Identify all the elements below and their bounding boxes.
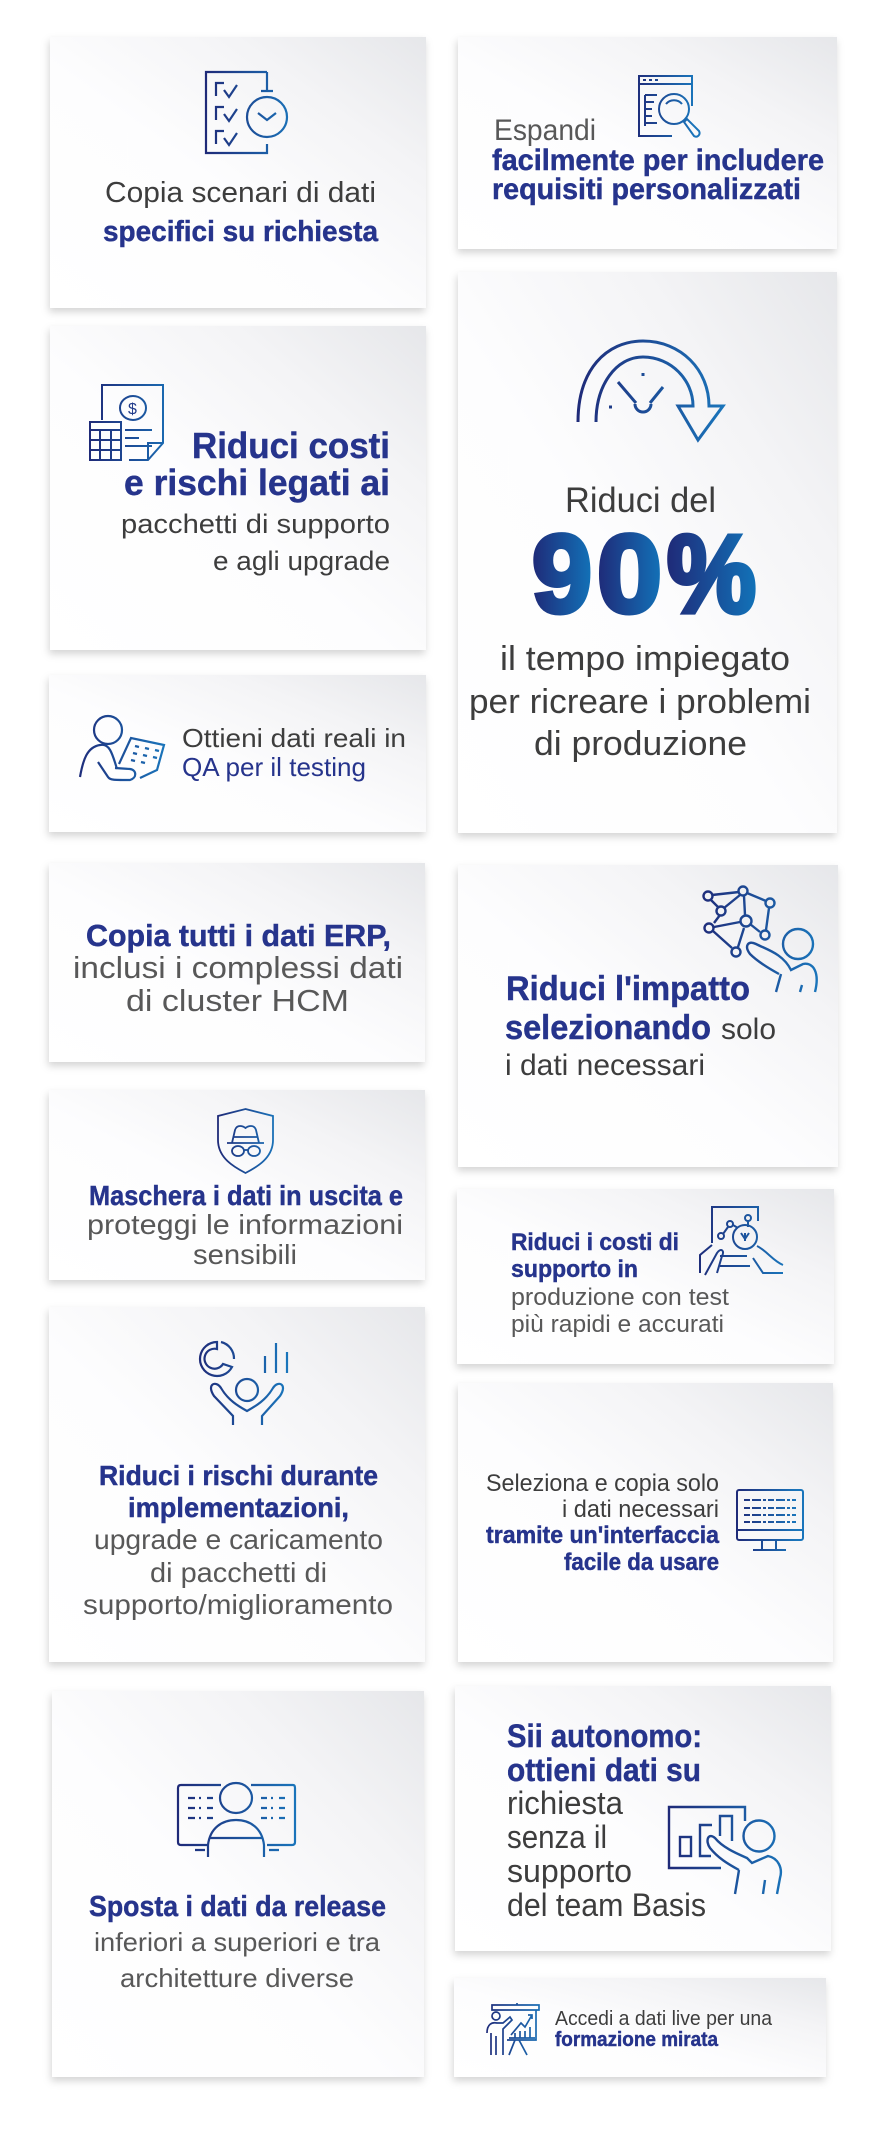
- text: riduci i rischi: di pacchetti di: [150, 1557, 327, 1588]
- text: copia scenari: specifici su richiesta: [103, 216, 379, 248]
- icon: presenter at board: [487, 2003, 539, 2055]
- text: riduci l'impatto: Riduci l'impatto: [506, 970, 750, 1008]
- text: riduci i costi: Riduci i costi di: [511, 1229, 679, 1256]
- text: riduci costi: e rischi legati ai: [124, 462, 390, 503]
- text: maschera: [87, 1180, 403, 1270]
- panel: seleziona e copia: [458, 1383, 833, 1662]
- panel: sposta i dati: [52, 1691, 424, 2077]
- panel: copia scenari di dati: [50, 37, 426, 308]
- text: riduci i rischi: Riduci i rischi durante: [99, 1460, 378, 1491]
- stat: 90%: %: [667, 513, 756, 636]
- text: riduci i rischi: supporto/miglioramento: [83, 1589, 393, 1620]
- icon: person at monitor: [178, 1783, 295, 1857]
- text: copia scenari: [103, 177, 379, 248]
- text: accedi a dati live: [555, 2008, 773, 2051]
- text: riduci i rischi: upgrade e caricamento: [94, 1524, 383, 1555]
- text: il tempo impiegato: [469, 640, 811, 763]
- card background: [49, 1090, 425, 1280]
- panel: maschera i dati: [49, 1090, 425, 1280]
- text: riduci i costi: supporto in: [511, 1256, 638, 1283]
- text: riduci i costi: produzione con test: [511, 1284, 729, 1311]
- card background: [49, 863, 425, 1062]
- icon: hands with tablet and magnifier: [700, 1207, 783, 1275]
- text: copia tutti i dati ERP: [73, 918, 403, 1018]
- icon: clock with arrow: [578, 341, 723, 440]
- panel: dati reali in QA: [49, 675, 426, 832]
- text: sposta i dati: [89, 1891, 386, 1993]
- text: riduci i rischi: [83, 1460, 393, 1620]
- text: sii autonomo: del team Basis: [507, 1887, 706, 1923]
- card background: [50, 326, 426, 650]
- card background: [50, 37, 426, 308]
- text: sii autonomo: ottieni dati su: [507, 1752, 701, 1788]
- stat: 90%: [532, 513, 756, 636]
- text: sii autonomo: senza il: [507, 1819, 607, 1855]
- text: riduci l'impatto: selezionando: [505, 1009, 711, 1047]
- panel: riduci i rischi: [49, 1307, 425, 1662]
- card background: [458, 272, 837, 833]
- text: espandi: [492, 114, 824, 206]
- text: maschera: proteggi le informazioni: [87, 1209, 403, 1240]
- icon: person at laptop: [80, 716, 164, 780]
- text: riduci costi: e agli upgrade: [213, 546, 390, 576]
- text: riduci costi: Riduci costi: [192, 425, 390, 466]
- panel: riduci costi e rischi: [50, 326, 426, 650]
- text: sii autonomo: [507, 1718, 706, 1923]
- card background: [457, 1189, 834, 1364]
- text: seleziona e copia: facile da usare: [564, 1549, 719, 1576]
- text: seleziona e copia: Seleziona e copia solo: [486, 1470, 719, 1497]
- panel: riduci del 90%: [458, 272, 837, 833]
- text: copia tutti i dati ERP: inclusi i complessi dati: [73, 950, 403, 985]
- stat: 90%: 0: [597, 513, 662, 636]
- text: riduci l'impatto: solo: [721, 1013, 776, 1046]
- text: sii autonomo: Sii autonomo:: [507, 1718, 702, 1754]
- text: ottieni dati reali: Ottieni dati reali in: [182, 723, 406, 753]
- text: accedi a dati live: Accedi a dati live per una: [555, 2008, 773, 2030]
- icon: window with magnifier: [639, 76, 700, 137]
- text: copia tutti i dati ERP: Copia tutti i dati ERP,: [86, 918, 391, 953]
- text: sposta i dati: Sposta i dati da release: [89, 1891, 386, 1923]
- card background: [458, 37, 837, 249]
- text: riduci i rischi: implementazioni,: [128, 1492, 349, 1523]
- text: seleziona e copia: i dati necessari: [562, 1496, 719, 1523]
- text: espandi: Espandi: [494, 114, 596, 147]
- icon: invoice with table: $: [128, 401, 137, 418]
- text: il tempo impiegato: il tempo impiegato: [500, 640, 790, 678]
- text: riduci l'impatto: i dati necessari: [505, 1049, 705, 1082]
- icon: person with network: [704, 886, 817, 992]
- panel: copia tutti i dati ERP: [49, 863, 425, 1062]
- text: copia tutti i dati ERP: di cluster HCM: [126, 983, 349, 1018]
- icon: monitor: [737, 1490, 803, 1550]
- text: maschera: Maschera i dati in uscita e: [89, 1180, 403, 1211]
- text: sposta i dati: architetture diverse: [120, 1963, 354, 1993]
- text: copia scenari: Copia scenari di dati: [105, 177, 376, 209]
- text: riduci i costi: [511, 1229, 729, 1338]
- text: riduci costi: [121, 425, 390, 576]
- card background: [52, 1691, 424, 2077]
- icon: checklist with clock: [206, 72, 287, 153]
- icon: shield with spy: [218, 1109, 273, 1173]
- stat: 90%: 9: [532, 513, 592, 636]
- text: il tempo impiegato: di produzione: [534, 725, 747, 763]
- text: sposta i dati: inferiori a superiori e tra: [94, 1927, 381, 1957]
- icon: person at chart board: [669, 1807, 781, 1894]
- panel: espandi facilmente: [458, 37, 837, 249]
- panel: riduci i costi di supporto: [457, 1189, 834, 1364]
- card background: [49, 1307, 425, 1662]
- text: espandi: requisiti personalizzati: [492, 173, 801, 206]
- card background: [455, 1686, 831, 1951]
- text: il tempo impiegato: per ricreare i problemi: [469, 683, 811, 721]
- text: accedi a dati live: formazione mirata: [555, 2029, 719, 2051]
- card background: [454, 1978, 826, 2077]
- text: seleziona e copia: tramite un'interfaccia: [486, 1522, 720, 1549]
- text: sii autonomo: supporto: [507, 1853, 632, 1889]
- text: riduci del: Riduci del: [565, 481, 716, 520]
- text: maschera: sensibili: [193, 1239, 297, 1270]
- panel: sii autonomo: [455, 1686, 831, 1951]
- text: seleziona e copia: [486, 1470, 720, 1576]
- panel: formazione mirata: [454, 1978, 826, 2077]
- text: riduci i costi: più rapidi e accurati: [511, 1311, 724, 1338]
- text: ottieni dati reali: QA per il testing: [182, 752, 366, 782]
- panel: riduci l'impatto: [458, 865, 838, 1167]
- text: sii autonomo: richiesta: [507, 1785, 623, 1821]
- text: ottieni dati reali: [182, 723, 406, 782]
- card background: [458, 1383, 833, 1662]
- card background: [458, 865, 838, 1167]
- text: riduci costi: pacchetti di supporto: [121, 509, 390, 539]
- icon: person with charts: [200, 1342, 287, 1425]
- text: riduci l'impatto: [505, 970, 776, 1082]
- text: espandi: facilmente per includere: [492, 144, 824, 177]
- card background: [49, 675, 426, 832]
- icon: invoice with table: [90, 385, 163, 460]
